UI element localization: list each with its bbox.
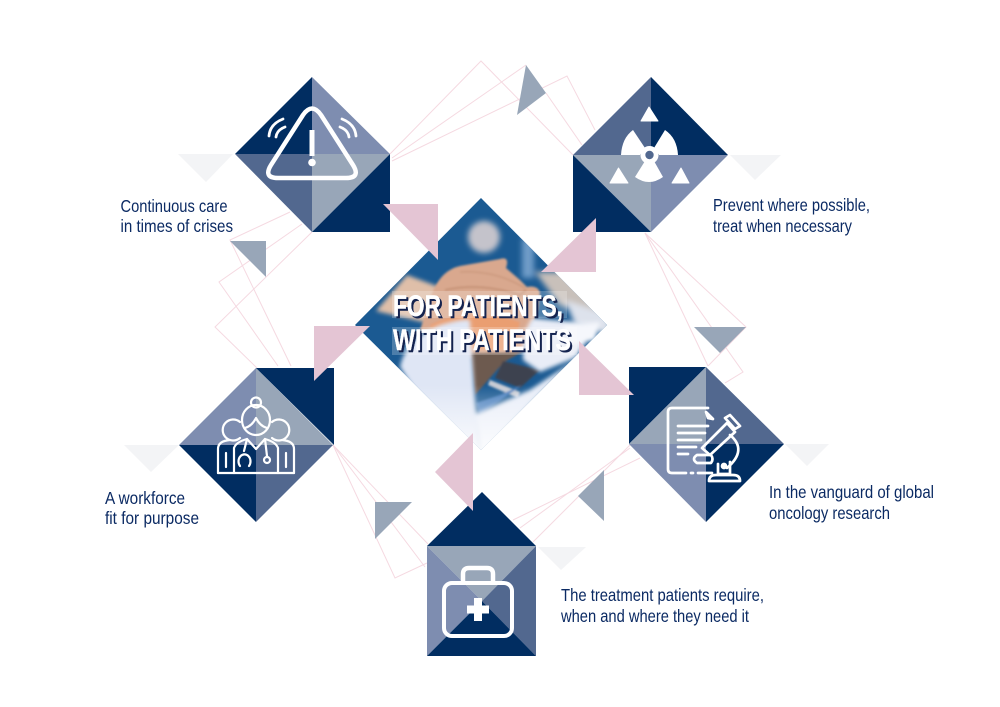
icon: warning triangle bbox=[268, 108, 356, 178]
label: continuous care: in times of crises bbox=[120, 216, 233, 236]
label: treatment: when and where they need it bbox=[560, 606, 749, 626]
pale accent triangles bbox=[124, 154, 829, 570]
panel: treatment bbox=[427, 492, 536, 656]
central photo diamond bbox=[350, 195, 610, 456]
label: treatment bbox=[560, 585, 764, 626]
label: prevent where possible: treat when necessary bbox=[713, 216, 852, 236]
label: prevent where possible: Prevent where possible, bbox=[713, 195, 870, 215]
label: workforce: fit for purpose bbox=[105, 508, 199, 528]
label: continuous care bbox=[120, 196, 233, 236]
infographic canvas bbox=[105, 60, 933, 656]
hands bbox=[420, 258, 540, 415]
blurred forearm bbox=[376, 275, 442, 326]
pink pointer triangles bbox=[314, 204, 634, 511]
title with translucent bands: WITH PATIENTS bbox=[393, 324, 571, 357]
label: treatment: The treatment patients require, bbox=[561, 585, 764, 605]
label: prevent where possible bbox=[713, 195, 870, 236]
label: workforce: A workforce bbox=[105, 488, 185, 508]
panel: workforce bbox=[179, 368, 334, 522]
icon: document and microscope bbox=[668, 408, 740, 481]
connector lines bbox=[215, 61, 746, 578]
label: oncology research bbox=[769, 482, 934, 523]
icon: radiation symbol bbox=[610, 107, 689, 183]
icon: medical case bbox=[444, 568, 512, 636]
title with translucent bands bbox=[392, 290, 577, 357]
title with translucent bands: FOR PATIENTS, bbox=[393, 290, 563, 323]
label: workforce bbox=[105, 488, 199, 528]
sleeves bbox=[400, 318, 600, 456]
label: oncology research: oncology research bbox=[769, 503, 890, 523]
panel: continuous care bbox=[235, 77, 390, 232]
panel: oncology research bbox=[629, 367, 784, 522]
slate accent triangles bbox=[230, 65, 746, 539]
label: continuous care: Continuous care bbox=[120, 196, 228, 216]
label: oncology research: In the vanguard of global bbox=[769, 482, 934, 502]
panel: prevent where possible bbox=[573, 77, 728, 232]
icon: medical staff group bbox=[218, 398, 294, 473]
